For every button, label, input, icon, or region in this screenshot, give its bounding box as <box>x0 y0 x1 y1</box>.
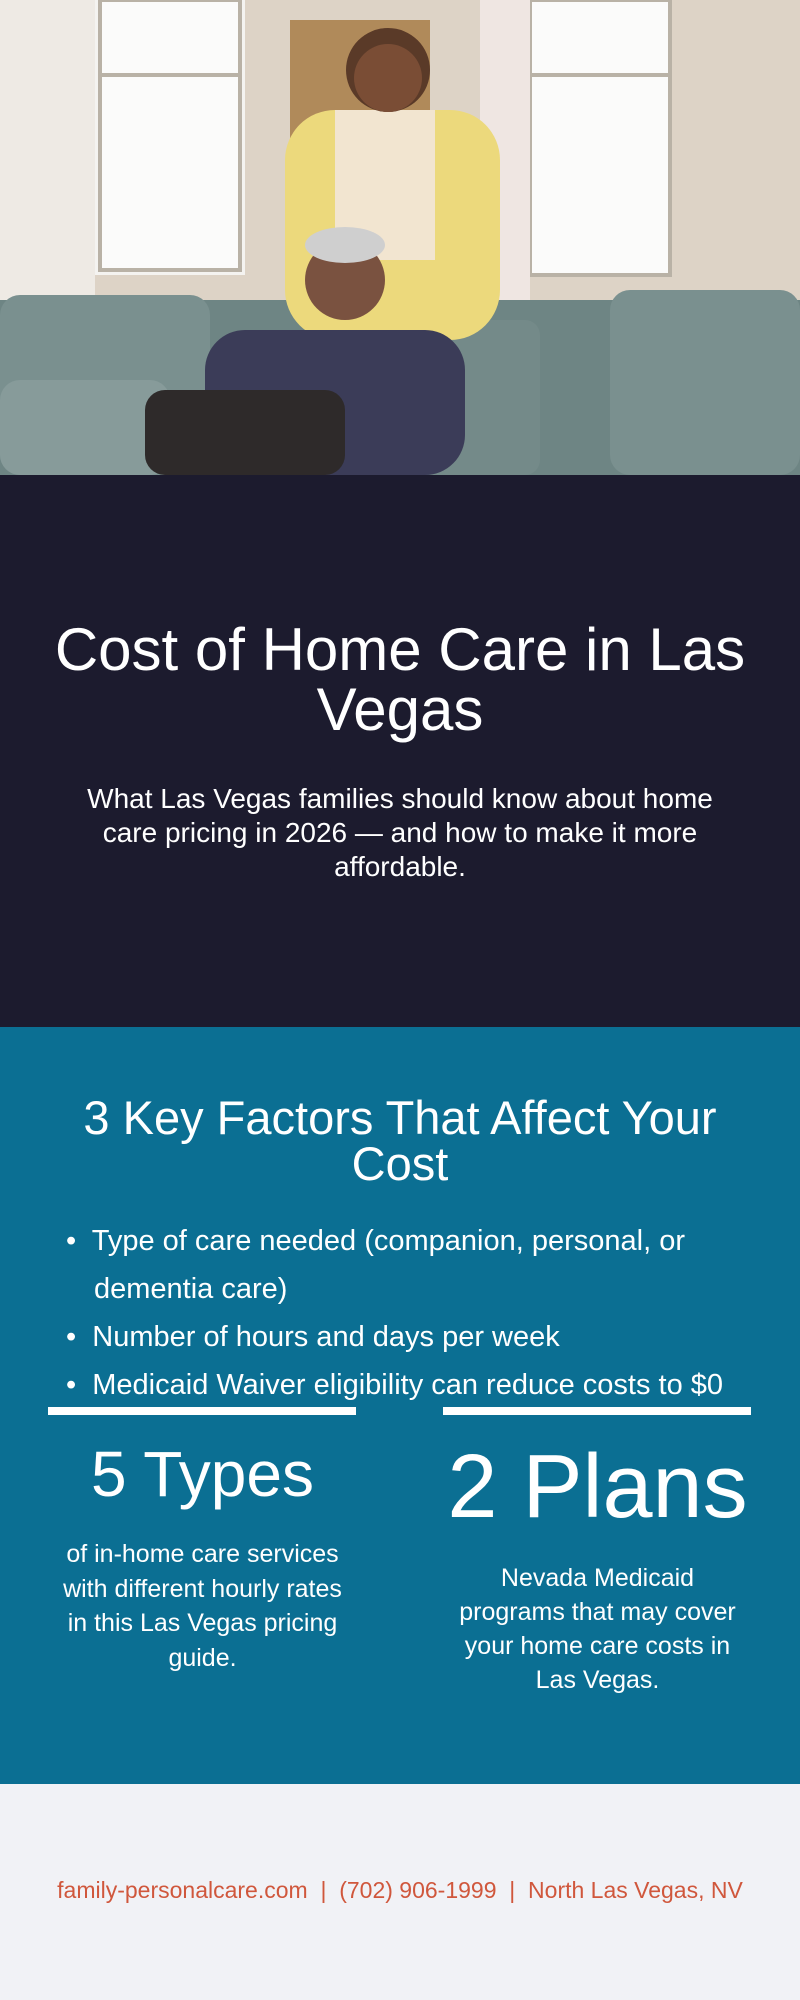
dark header section <box>0 475 800 1027</box>
stat: 5 types: of in-home care services with different hourly rates in this Las Vegas pricing guide. <box>63 1540 342 1672</box>
bullet list: • Number of hours and days per week <box>66 1321 560 1353</box>
icon: man <box>145 227 465 475</box>
stat: 5 types <box>63 1438 342 1672</box>
bullet list: • Type of care needed (companion, personal, or <box>66 1225 685 1257</box>
footer <box>0 1784 800 2000</box>
stat: 2 plans: 2 Plans <box>447 1437 748 1537</box>
stat: 2 plans <box>447 1437 748 1694</box>
title: Cost of Home Care in Las Vegas <box>55 616 745 743</box>
footer: family-personalcare.com | (702) 906-1999 | North Las Vegas, NV <box>57 1877 743 1903</box>
icon: woman <box>285 28 500 340</box>
heading: 3 key factors: 3 Key Factors That Affect Your Cost <box>83 1091 717 1190</box>
stat: 5 types: 5 Types <box>91 1438 314 1510</box>
hero photo <box>0 0 800 475</box>
icon: sofa <box>0 290 800 475</box>
subtitle: What Las Vegas families should know about home care pricing in 2026 — and how to make it more affordable. <box>87 783 713 882</box>
icon: right window <box>530 0 670 275</box>
icon: left window <box>95 0 245 275</box>
bullet list: • Medicaid Waiver eligibility can reduce costs to $0 <box>66 1369 723 1401</box>
stat: 2 plans: Nevada Medicaid programs that may cover your home care costs in Las Vegas. <box>459 1564 736 1694</box>
bullet list <box>66 1225 723 1401</box>
teal section <box>0 1027 800 1784</box>
bullet list: dementia care) <box>94 1273 287 1305</box>
